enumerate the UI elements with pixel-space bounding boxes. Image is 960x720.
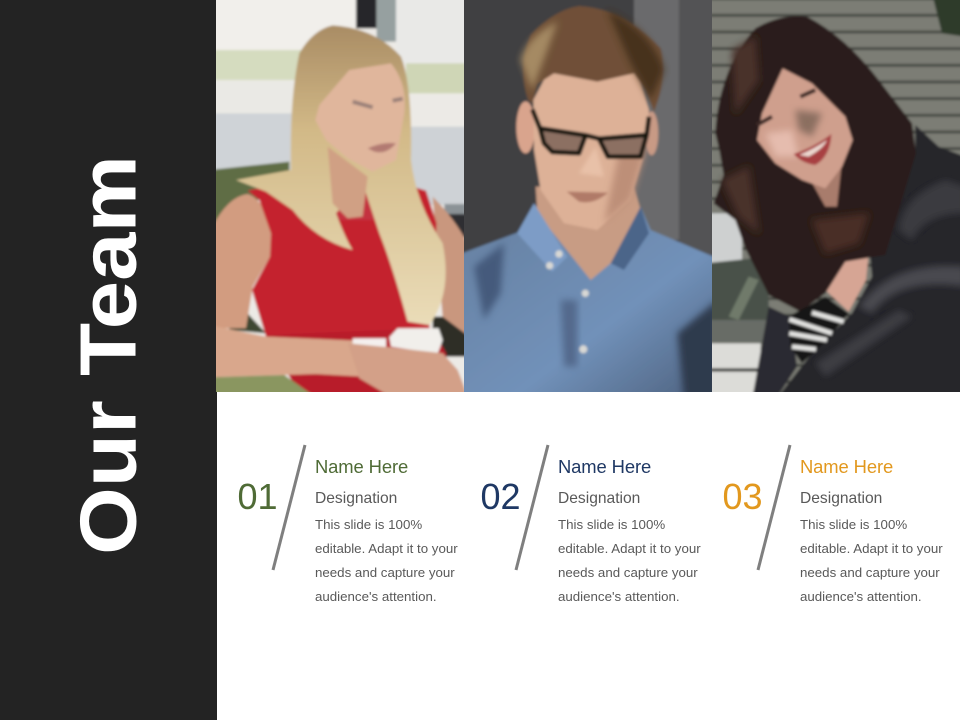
description: audience's attention.	[558, 589, 680, 604]
striped shirt	[789, 297, 849, 363]
description	[315, 517, 458, 604]
title: Our Team	[64, 155, 153, 555]
number 03: 03	[722, 476, 763, 517]
mouth	[567, 192, 608, 202]
hair	[714, 16, 916, 312]
left arm	[209, 194, 271, 328]
description	[800, 517, 943, 604]
description: This slide is 100%	[315, 517, 422, 532]
slash divider	[756, 444, 792, 570]
neck	[812, 168, 844, 209]
number 02: 02	[480, 476, 521, 517]
description: audience's attention.	[800, 589, 922, 604]
shirt	[457, 203, 717, 400]
photo: man with glasses	[457, 0, 721, 400]
name: Name Here	[315, 456, 408, 477]
designation: Designation	[800, 490, 882, 507]
member 1	[238, 444, 458, 604]
hair	[523, 6, 663, 112]
neck	[536, 187, 641, 280]
slash divider	[514, 444, 550, 570]
team photos	[216, 0, 960, 392]
neck	[328, 147, 368, 218]
ears	[516, 101, 535, 153]
glasses	[532, 109, 649, 157]
face	[757, 68, 853, 188]
eyes	[757, 90, 815, 125]
hair	[236, 25, 446, 325]
forearm	[216, 326, 360, 379]
description: This slide is 100%	[558, 517, 665, 532]
right arm	[432, 196, 464, 336]
member 3	[722, 444, 943, 604]
description: needs and capture your	[800, 565, 940, 580]
description: editable. Adapt it to your	[315, 541, 458, 556]
mouth	[794, 134, 831, 165]
description: editable. Adapt it to your	[558, 541, 701, 556]
description: needs and capture your	[558, 565, 698, 580]
sidebar panel	[0, 0, 217, 720]
name: Name Here	[558, 456, 651, 477]
jacket	[775, 125, 960, 400]
collar	[517, 203, 567, 272]
dress	[248, 185, 437, 342]
hands	[350, 342, 464, 392]
shirt buttons	[546, 250, 589, 353]
coffee cup	[389, 328, 443, 354]
photo: woman in red dress	[209, 0, 473, 400]
description: editable. Adapt it to your	[800, 541, 943, 556]
sofa	[209, 162, 289, 227]
description: This slide is 100%	[800, 517, 907, 532]
thigh	[216, 373, 312, 392]
chest	[825, 256, 870, 313]
member 2	[480, 444, 701, 604]
face	[315, 63, 405, 172]
designation: Designation	[558, 490, 640, 507]
chest	[334, 192, 374, 220]
photo: woman in leather jacket	[705, 0, 960, 400]
name: Name Here	[800, 456, 893, 477]
face	[533, 73, 649, 230]
description: audience's attention.	[315, 589, 437, 604]
slash divider	[272, 444, 306, 570]
description: needs and capture your	[315, 565, 455, 580]
designation: Designation	[315, 490, 397, 507]
description	[558, 517, 701, 604]
number 01: 01	[238, 476, 278, 517]
